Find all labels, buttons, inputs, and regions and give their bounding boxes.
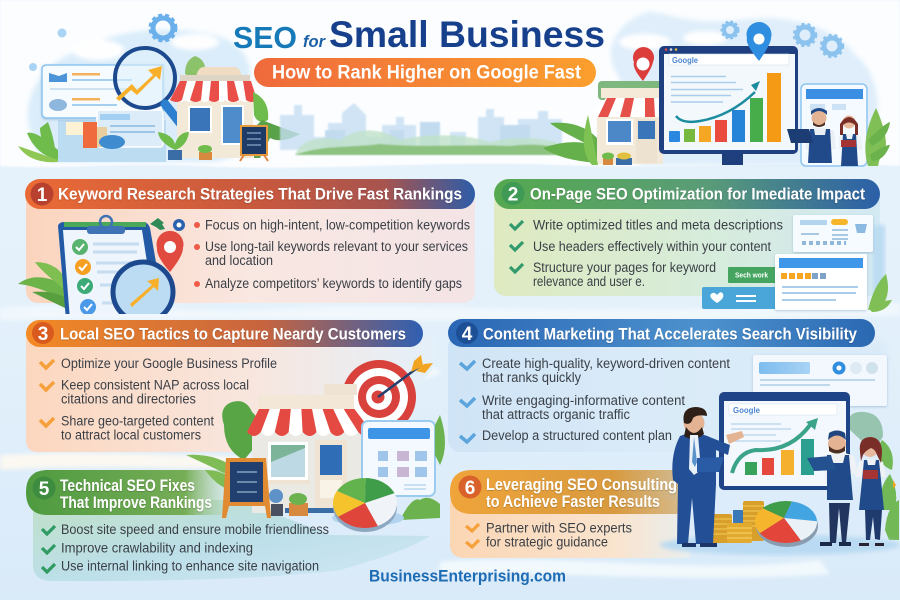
- illustration: Google monitor: Google: [733, 405, 760, 415]
- illustration: tablet with team: [787, 84, 890, 166]
- checklist: that attracts organic traffic: [482, 407, 630, 422]
- checklist: Boost site speed and ensure mobile friendliness: [61, 522, 329, 537]
- illustration: floor pool: [660, 535, 900, 555]
- panel 5: technical SEO: [26, 470, 430, 581]
- heading text: Content Marketing That Accelerates Search Visibility: [483, 324, 857, 344]
- title: SEO: [233, 21, 297, 55]
- checklist: that ranks quickly: [482, 370, 581, 385]
- checklist: Improve crawlability and indexing: [61, 540, 253, 556]
- panel body: [26, 190, 475, 303]
- number badge: [502, 182, 524, 206]
- footer website: BusinessEnterprising.com: [369, 568, 566, 586]
- heading bar: [26, 470, 225, 515]
- checklist: Write engaging-informative content: [482, 393, 685, 408]
- checklist: Partner with SEO experts: [486, 520, 632, 536]
- checklist: [40, 356, 277, 442]
- checklist: [466, 520, 632, 550]
- number badge: [32, 476, 56, 500]
- heading text: On-Page SEO Optimization for Imediate Impact: [530, 184, 865, 204]
- heading text: Technical SEO Fixes: [60, 476, 195, 495]
- icon: gear left: [29, 15, 176, 71]
- number badge: 1: [37, 185, 48, 206]
- panel 3: local SEO: [26, 320, 435, 452]
- illustration: Google monitor with bar chart: [659, 46, 798, 165]
- icon: red map pin: [156, 231, 184, 272]
- panel body: [33, 500, 430, 581]
- header illustration: left cloud: [28, 29, 251, 162]
- heading bar: [26, 320, 423, 347]
- illustration: web cards: [702, 215, 892, 312]
- checklist: Structure your pages for keyword: [533, 260, 716, 275]
- bullet list: Analyze competitors’ keywords to identify gaps: [205, 276, 462, 291]
- small icons: [150, 218, 185, 231]
- heading text: Local SEO Tactics to Capture Neardy Customers: [60, 324, 406, 344]
- number badge: 5: [39, 479, 50, 500]
- checklist: to attract local customers: [61, 428, 201, 442]
- number badge: [30, 182, 54, 206]
- number badge: 4: [462, 324, 473, 345]
- checklist: Optimize your Google Business Profile: [61, 356, 277, 371]
- illustration: pie chart right: [755, 501, 818, 547]
- panel body: [494, 190, 880, 296]
- header illustration: right cloud: [611, 12, 878, 165]
- subtitle pill: [254, 58, 596, 87]
- number badge: [456, 322, 478, 345]
- illustration: city skyline: [280, 103, 562, 150]
- checklist: Use headers effectively within your content: [533, 239, 771, 254]
- heading bar: [25, 179, 475, 209]
- heading bar: [494, 179, 880, 209]
- number badge: [32, 322, 54, 345]
- title: for: [303, 32, 326, 51]
- bullet list: Focus on high-intent, low-competition keywords: [205, 218, 470, 232]
- checklist: Use internal linking to enhance site navigation: [61, 558, 319, 574]
- illustration: search card with magnifier: [18, 48, 180, 162]
- number badge: [458, 476, 482, 499]
- heading text: [60, 476, 212, 512]
- checklist: Create high-quality, keyword-driven content: [482, 356, 730, 371]
- number badge: 2: [508, 184, 518, 206]
- illustration: local tablet: [362, 415, 445, 520]
- bullet list: and location: [205, 253, 273, 268]
- number badge: 3: [38, 324, 48, 345]
- illustration: coins: [712, 501, 764, 543]
- illustration: storefront right: [543, 81, 663, 165]
- icon: gears right: [722, 22, 843, 57]
- panel 4: content marketing: [448, 319, 885, 452]
- checklist: citations and directories: [61, 392, 196, 406]
- heading bar: [448, 319, 875, 347]
- checklist: Write optimized titles and meta descriptions: [533, 218, 783, 232]
- illustration: archery target: [342, 355, 433, 434]
- panel body: [26, 335, 435, 452]
- heading bar: [450, 470, 682, 514]
- illustration: clipboard: [58, 216, 173, 322]
- illustration: leaves: [18, 262, 68, 308]
- panel body: [450, 500, 690, 558]
- heading text: Leveraging SEO Consulting: [486, 475, 677, 494]
- checklist: [460, 356, 730, 443]
- illustration: storefront left: [158, 56, 300, 161]
- icon: red map pin: [633, 47, 654, 81]
- heading text: [486, 475, 677, 511]
- icon: blue map pin: [746, 22, 772, 61]
- subtitle pill: How to Rank Higher on Google Fast: [272, 62, 582, 84]
- illustration: Google monitor: [719, 392, 850, 490]
- checklist: Share geo-targeted content: [61, 414, 214, 428]
- checklist: Develop a structured content plan: [482, 428, 672, 443]
- heading text: Keyword Research Strategies That Drive Fast Rankings: [58, 184, 462, 204]
- illustration: main storefront: [186, 384, 372, 516]
- checklist: [42, 522, 329, 574]
- illustration: team member woman: [855, 437, 886, 546]
- title: Small Business: [329, 13, 605, 55]
- panel body: [448, 335, 748, 452]
- illustration: chalkboard sign: [222, 458, 271, 518]
- number badge: 6: [465, 478, 475, 499]
- checklist: Keep consistent NAP across local: [61, 378, 249, 392]
- bullet list: [194, 218, 470, 291]
- heading text: That Improve Rankings: [60, 493, 212, 512]
- illustration: top web card: [753, 355, 887, 406]
- panel 2: on-page SEO: [494, 179, 892, 312]
- heading text: to Achieve Faster Results: [486, 492, 660, 511]
- checklist: relevance and user e.: [533, 274, 645, 289]
- illustration: team member man: [807, 430, 858, 546]
- checklist: for strategic guidance: [486, 534, 608, 550]
- illustration: right plants: [849, 412, 899, 540]
- panel 1: keyword research: [18, 179, 475, 322]
- illustration: pie chart left: [332, 478, 404, 532]
- bullet list: Use long-tail keywords relevant to your services: [205, 239, 468, 254]
- checklist: [510, 218, 783, 289]
- illustration: Google monitor with bar chart: Google: [672, 55, 698, 65]
- panel 6: SEO consulting: [450, 470, 690, 558]
- illustration: consultant with tablet: [672, 407, 744, 547]
- illustration: web cards: Sech work: [735, 272, 768, 280]
- illustration: green bushes: [295, 131, 590, 155]
